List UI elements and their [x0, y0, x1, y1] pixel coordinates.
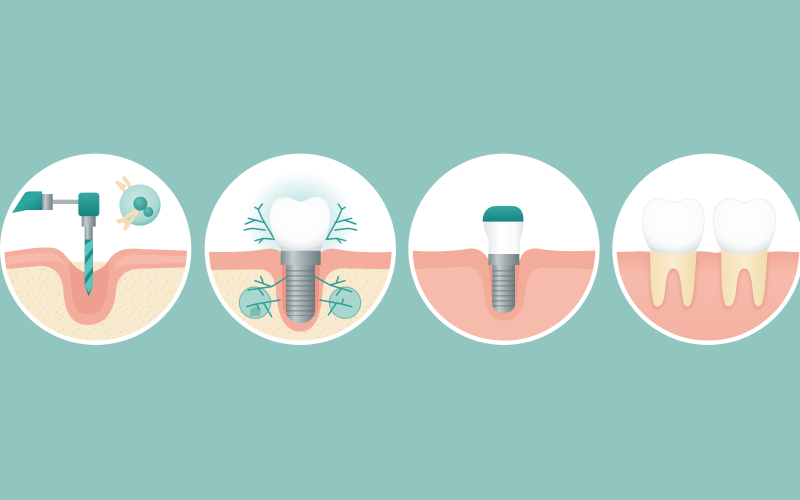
tooth crown	[269, 197, 330, 250]
tooth right	[713, 199, 775, 309]
socket inner	[69, 260, 109, 314]
panel: restored teeth	[612, 154, 800, 350]
bone	[6, 262, 186, 341]
implant screw	[281, 251, 321, 323]
icon: drill bit	[85, 239, 93, 297]
panel: drilling the bone	[0, 154, 193, 350]
glow	[250, 176, 350, 253]
branches lower	[247, 277, 352, 317]
healing cap	[483, 206, 523, 222]
gum with socket	[3, 248, 188, 325]
gum base	[414, 264, 594, 341]
icon: bone cell	[117, 178, 161, 229]
icon: dental drill handpiece	[12, 191, 99, 297]
gum	[208, 249, 395, 332]
abutment neck	[484, 222, 523, 254]
branches	[244, 204, 357, 243]
bone spheres left and right	[239, 287, 361, 318]
gum	[616, 251, 800, 341]
bone	[210, 264, 390, 341]
panel: healing abutment	[408, 154, 602, 350]
gum band	[412, 248, 597, 321]
socket	[488, 263, 520, 314]
implant screw	[488, 254, 519, 313]
socket	[282, 265, 320, 318]
tooth left	[642, 199, 704, 309]
infographic: four dental implant stages	[0, 154, 800, 345]
gum highlight	[5, 253, 187, 270]
panel: implant with osseointegration	[200, 154, 400, 350]
